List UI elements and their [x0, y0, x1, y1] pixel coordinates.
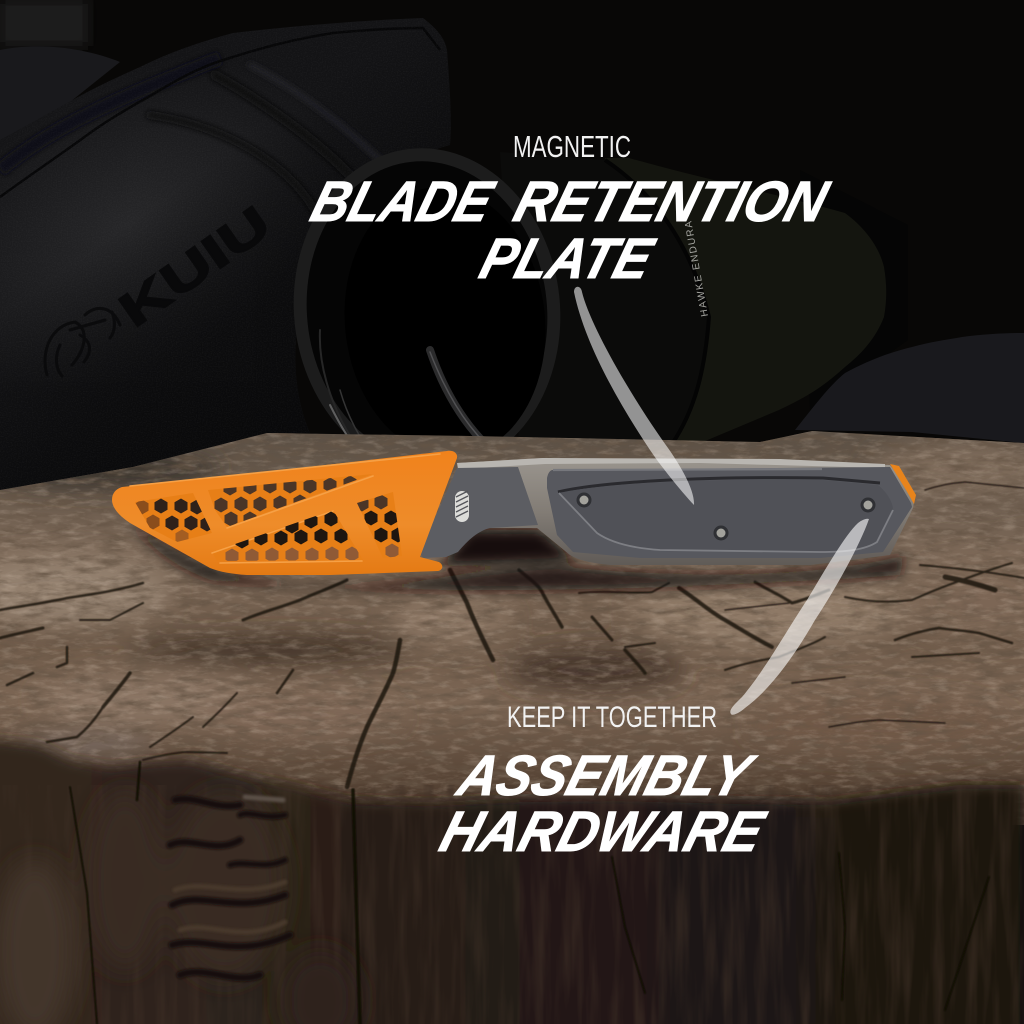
sheath honeycomb openings: right	[357, 495, 400, 558]
bag: rear fold	[0, 46, 120, 140]
jacket sleeve at right	[795, 333, 1024, 443]
tree stump	[0, 425, 1024, 1024]
background: lighter corner at top left	[0, 0, 88, 46]
heading: assembly hardware: ASSEMBLY	[450, 744, 762, 808]
bag seam	[0, 28, 440, 197]
scope dark front section	[500, 152, 709, 458]
bag fabric dither	[0, 31, 446, 487]
sheath edge highlights	[130, 454, 440, 563]
stump light speckle	[0, 425, 1024, 825]
front face dark streaks	[264, 785, 1023, 1024]
bag wrinkles	[146, 64, 381, 204]
bag lower shadow	[5, 262, 310, 488]
knife	[112, 451, 916, 575]
heading: blade retention plate: PLATE	[473, 227, 662, 291]
bag body	[0, 18, 450, 426]
stump grain speckle	[0, 425, 1024, 825]
bolster striped pin	[455, 491, 469, 522]
callout line: blade retention plate	[574, 287, 694, 505]
heading: blade retention plate	[304, 170, 836, 291]
plate screw	[860, 498, 876, 512]
scope tube	[278, 135, 908, 485]
knife orange handle accent	[890, 464, 916, 504]
stump top surface	[0, 425, 1024, 825]
stump cracks	[0, 482, 1024, 787]
scale rim highlight	[553, 469, 822, 470]
sheath honeycomb openings: top	[214, 476, 356, 526]
heading: blade retention plate: BLADE	[304, 170, 502, 234]
sheath honeycomb openings: bottom	[226, 512, 358, 564]
plate screw	[714, 526, 728, 540]
scope band lettering: HAWKE ENDURA	[683, 219, 711, 317]
knife handle steel body	[457, 458, 915, 565]
label: magnetic: MAGNETIC	[513, 129, 631, 164]
scope band edge	[605, 160, 709, 444]
heading: assembly hardware: HARDWARE	[433, 800, 773, 864]
label: keep it together: KEEP IT TOGETHER	[507, 701, 717, 734]
heading: assembly hardware	[433, 744, 773, 864]
callout line: assembly hardware	[730, 519, 869, 715]
bag logo text: KUIU	[110, 197, 280, 338]
sheath recessed panels	[135, 474, 402, 561]
scope rear housing	[800, 170, 908, 410]
stump front face	[0, 740, 1024, 1024]
orange honeycomb sheath	[112, 451, 457, 575]
scope olive body	[560, 158, 886, 458]
bag logo emblem	[45, 308, 120, 376]
scale inner panel	[558, 480, 893, 552]
front face lighter patches	[0, 790, 360, 1024]
handle scale plate	[547, 467, 912, 558]
knife bolster	[420, 467, 538, 558]
sheath honeycomb openings: left	[136, 498, 214, 544]
scope objective ring	[278, 135, 576, 485]
heading: blade retention plate: RETENTION	[507, 170, 836, 234]
ring inner threads	[320, 330, 504, 460]
bag upper ridge	[0, 58, 220, 170]
plate screw	[576, 492, 592, 508]
stump tonal patches	[0, 440, 1024, 755]
scale inner groove	[558, 478, 880, 492]
bag: black insulated jacket with logo	[0, 0, 460, 500]
knife spine highlight	[457, 458, 885, 469]
front face vertical cracks	[70, 762, 989, 1024]
shadow under knife	[130, 520, 905, 590]
bark knot ridges	[170, 797, 290, 978]
